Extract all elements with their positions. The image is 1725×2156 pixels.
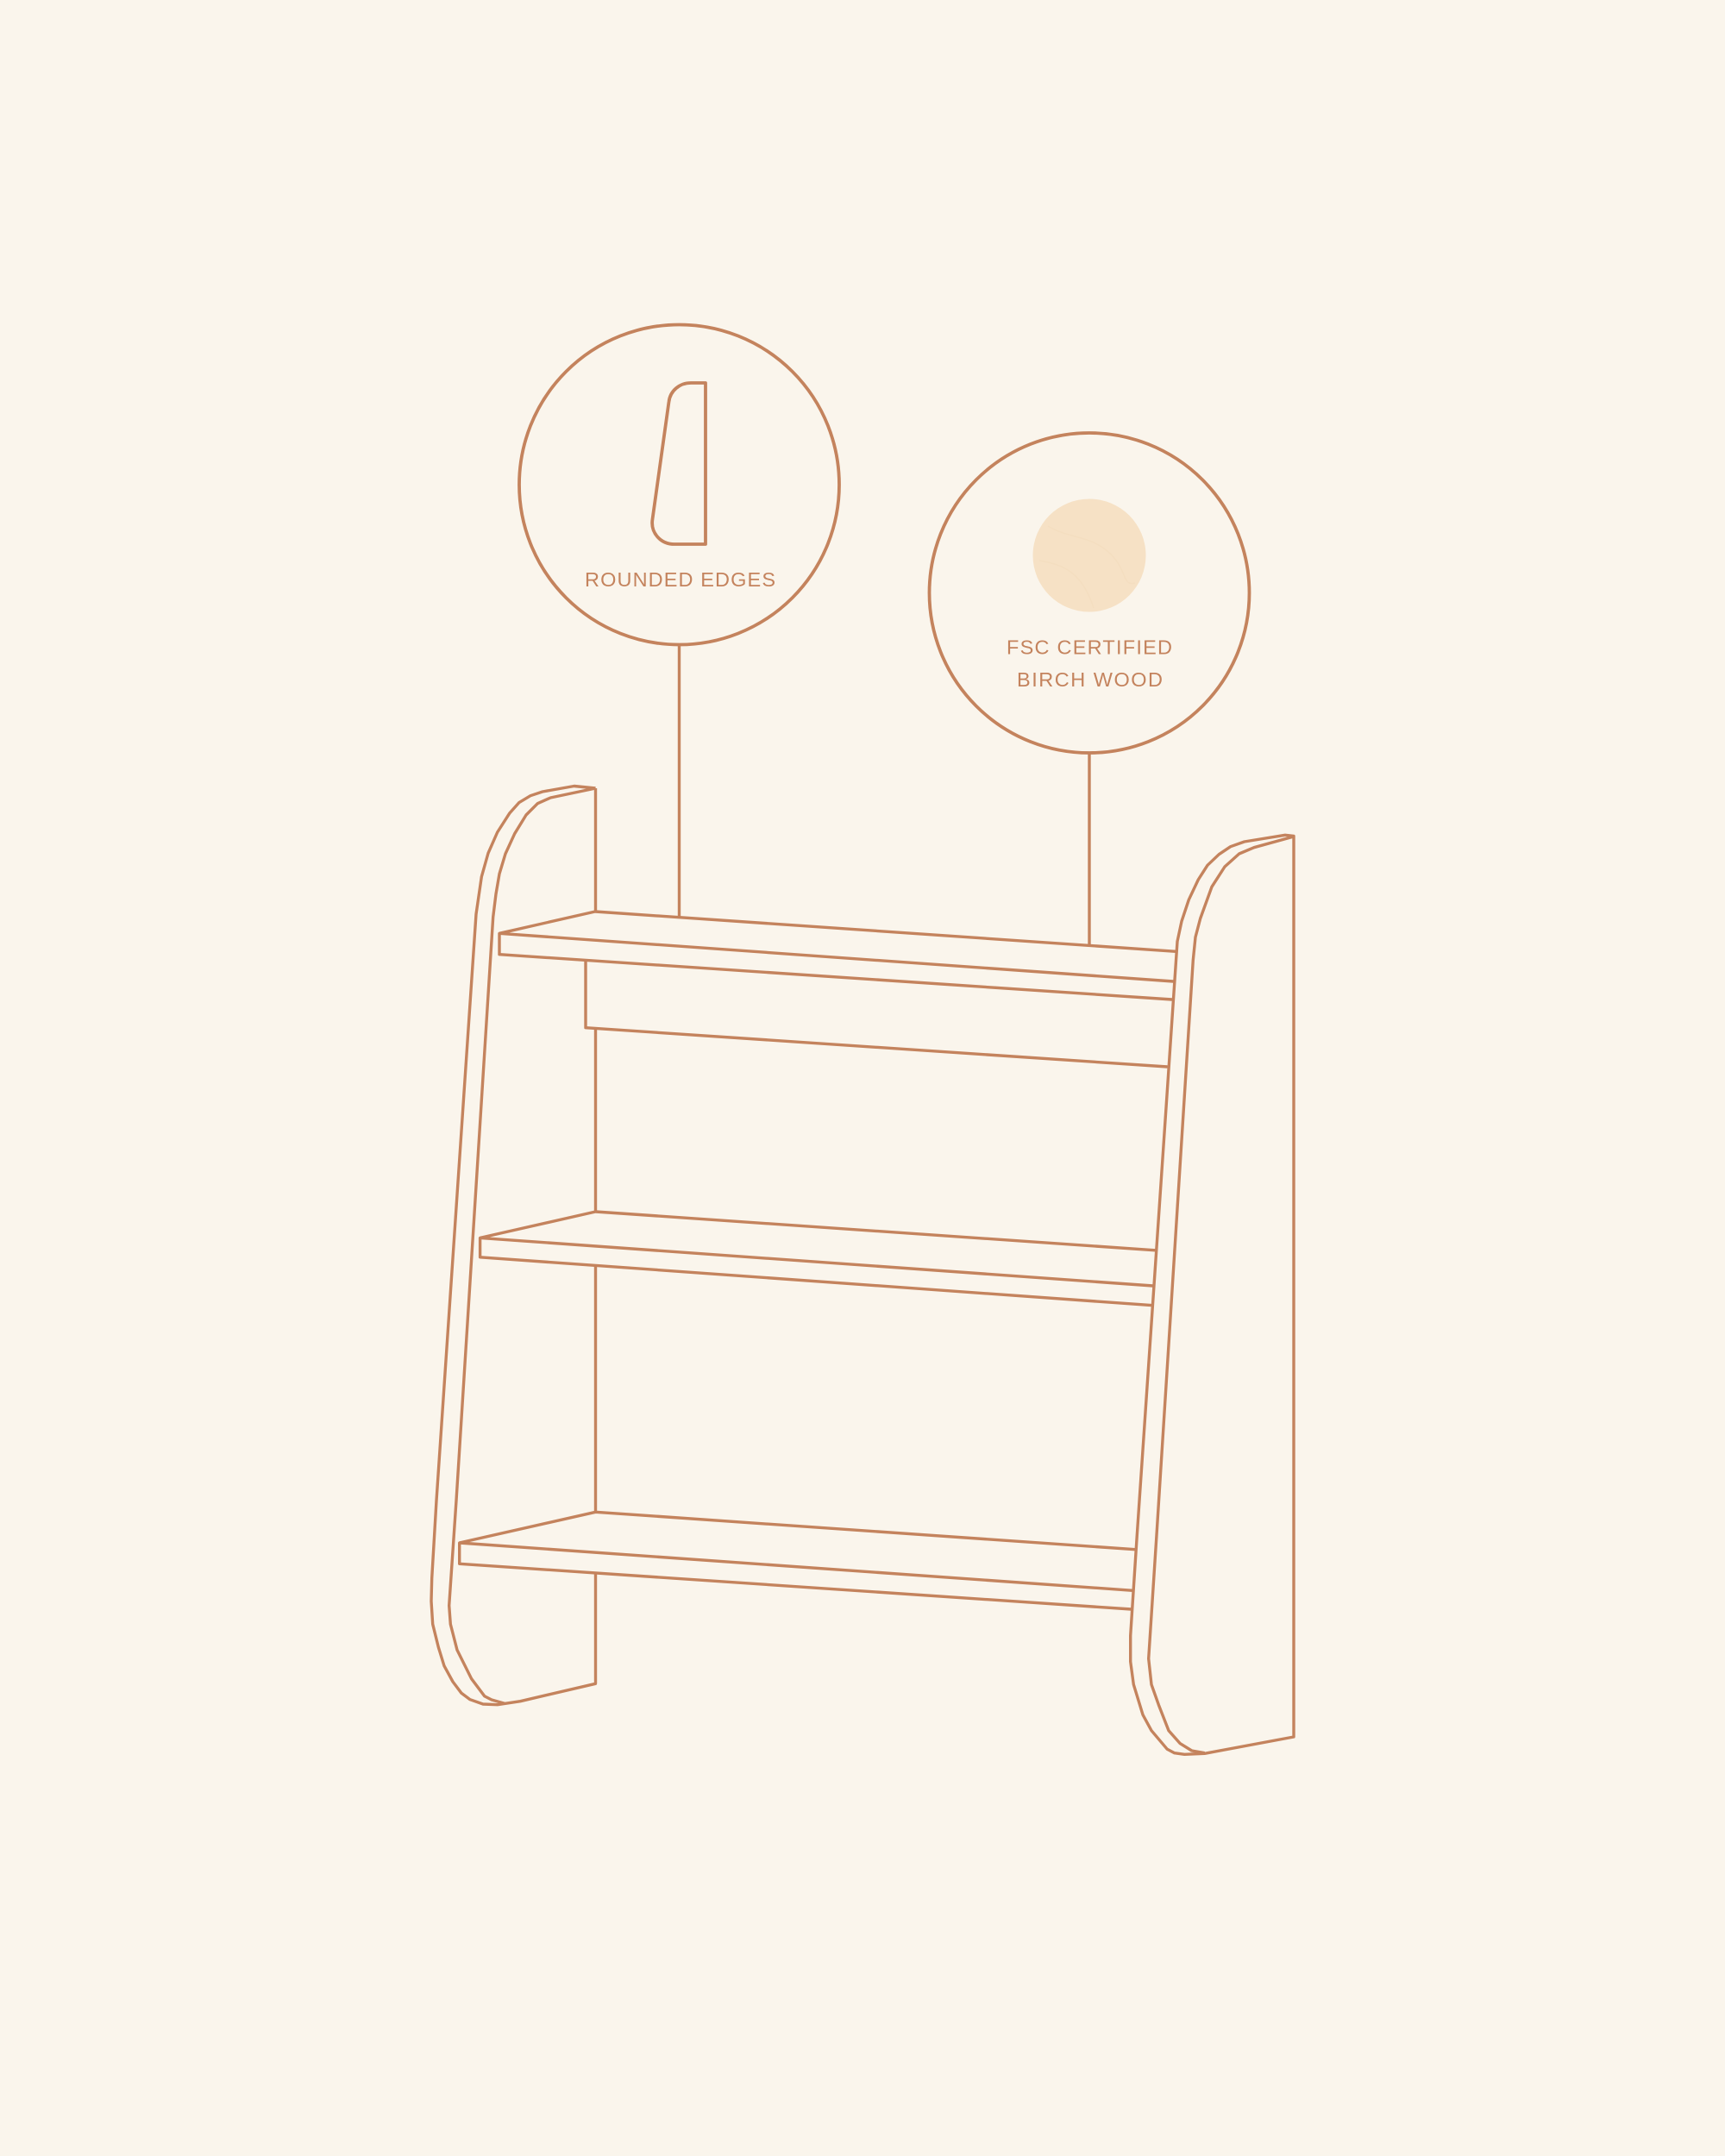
callout: FSC certified birch wood — [930, 433, 1249, 753]
label: FSC certified: FSC CERTIFIED — [1007, 636, 1172, 659]
shelf illustration — [431, 787, 1294, 1754]
top shelf — [499, 912, 1176, 1000]
label: birch wood: BIRCH WOOD — [1017, 668, 1163, 691]
label: rounded edges: ROUNDED EDGES — [585, 568, 775, 591]
bottom shelf — [460, 1512, 1135, 1609]
leader line: birch wood — [1088, 753, 1091, 945]
right side panel — [1131, 835, 1294, 1754]
left side panel — [431, 787, 595, 1705]
middle shelf — [480, 1212, 1156, 1306]
icon: rounded edge profile — [652, 383, 706, 544]
top shelf apron — [586, 960, 1168, 1067]
callout: rounded edges — [519, 324, 839, 645]
leader line: rounded edges — [678, 645, 681, 917]
swatch: birch wood — [1033, 498, 1145, 612]
